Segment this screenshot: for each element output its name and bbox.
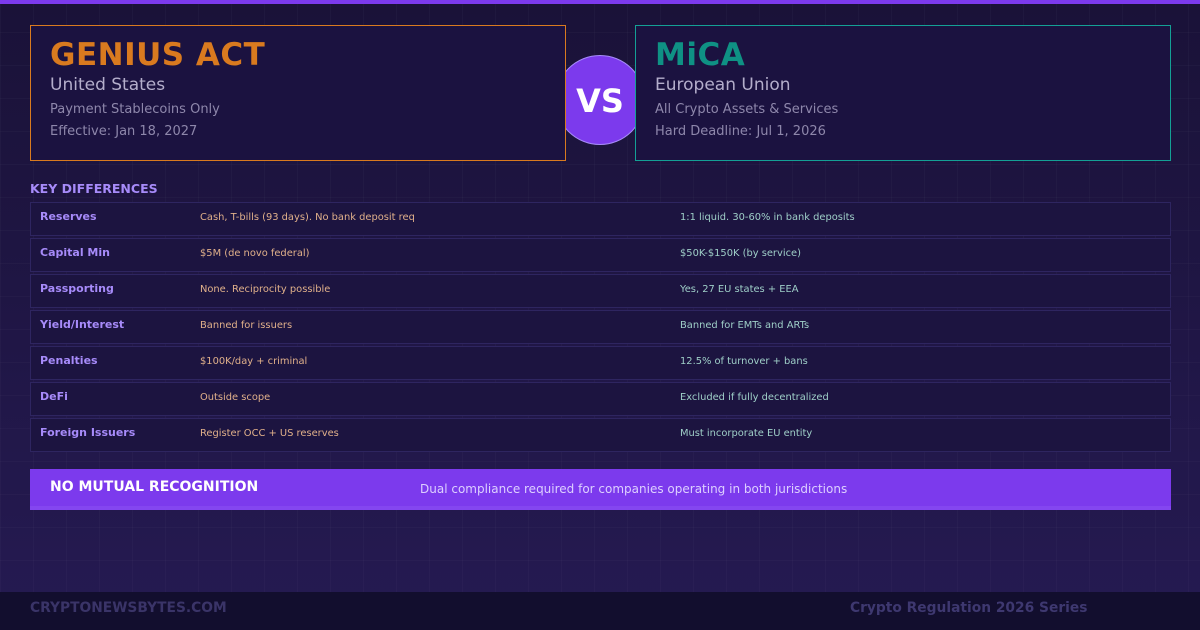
scope: All Crypto Assets & Services <box>655 102 838 117</box>
heading: MiCA: MiCA <box>655 37 745 73</box>
row: defi <box>30 382 1171 416</box>
row: capital: Capital Min <box>40 246 110 259</box>
row: yield: Banned for EMTs and ARTs <box>680 320 809 331</box>
row: passporting <box>30 274 1171 308</box>
row: foreign issuers: Must incorporate EU entity <box>680 428 812 439</box>
heading: GENIUS ACT: GENIUS ACT <box>50 37 265 73</box>
row: capital <box>30 238 1171 272</box>
row: penalties: $100K/day + criminal <box>200 356 307 367</box>
row: defi: DeFi <box>40 390 68 403</box>
row: yield <box>30 310 1171 344</box>
row: yield: Banned for issuers <box>200 320 292 331</box>
row: foreign issuers <box>30 418 1171 452</box>
row: reserves: Cash, T-bills (93 days). No bank deposit req <box>200 212 415 223</box>
panel: MiCA <box>635 25 1171 161</box>
callout: no mutual recognition <box>30 469 1171 510</box>
callout: no mutual recognition: NO MUTUAL RECOGNITION <box>50 479 258 495</box>
row: defi: Outside scope <box>200 392 270 403</box>
section heading: KEY DIFFERENCES <box>30 181 158 196</box>
date: Hard Deadline: Jul 1, 2026 <box>655 124 826 139</box>
row: penalties: 12.5% of turnover + bans <box>680 356 808 367</box>
row: passporting: Yes, 27 EU states + EEA <box>680 284 798 295</box>
date: Effective: Jan 18, 2027 <box>50 124 197 139</box>
table: key differences <box>30 202 1171 452</box>
row: foreign issuers: Foreign Issuers <box>40 426 135 439</box>
row: passporting: Passporting <box>40 282 114 295</box>
row: foreign issuers: Register OCC + US reserves <box>200 428 339 439</box>
callout: no mutual recognition: Dual compliance required for companies operating in both jurisdictions <box>420 482 847 496</box>
row: reserves: 1:1 liquid. 30-60% in bank deposits <box>680 212 855 223</box>
footer: CRYPTONEWSBYTES.COM <box>30 600 227 616</box>
subtitle: European Union <box>655 75 790 95</box>
row: reserves <box>30 202 1171 236</box>
row: penalties: Penalties <box>40 354 98 367</box>
row: passporting: None. Reciprocity possible <box>200 284 330 295</box>
row: penalties <box>30 346 1171 380</box>
footer <box>0 592 1200 630</box>
row: reserves: Reserves <box>40 210 97 223</box>
row: capital: $50K-$150K (by service) <box>680 248 801 259</box>
vs circle <box>555 55 645 145</box>
row: defi: Excluded if fully decentralized <box>680 392 829 403</box>
vs circle: VS <box>576 82 624 120</box>
panel: GENIUS ACT <box>30 25 566 161</box>
row: yield: Yield/Interest <box>40 318 124 331</box>
scope: Payment Stablecoins Only <box>50 102 220 117</box>
top accent bar <box>0 0 1200 4</box>
footer: Crypto Regulation 2026 Series <box>850 600 1087 616</box>
row: capital: $5M (de novo federal) <box>200 248 310 259</box>
subtitle: United States <box>50 75 165 95</box>
